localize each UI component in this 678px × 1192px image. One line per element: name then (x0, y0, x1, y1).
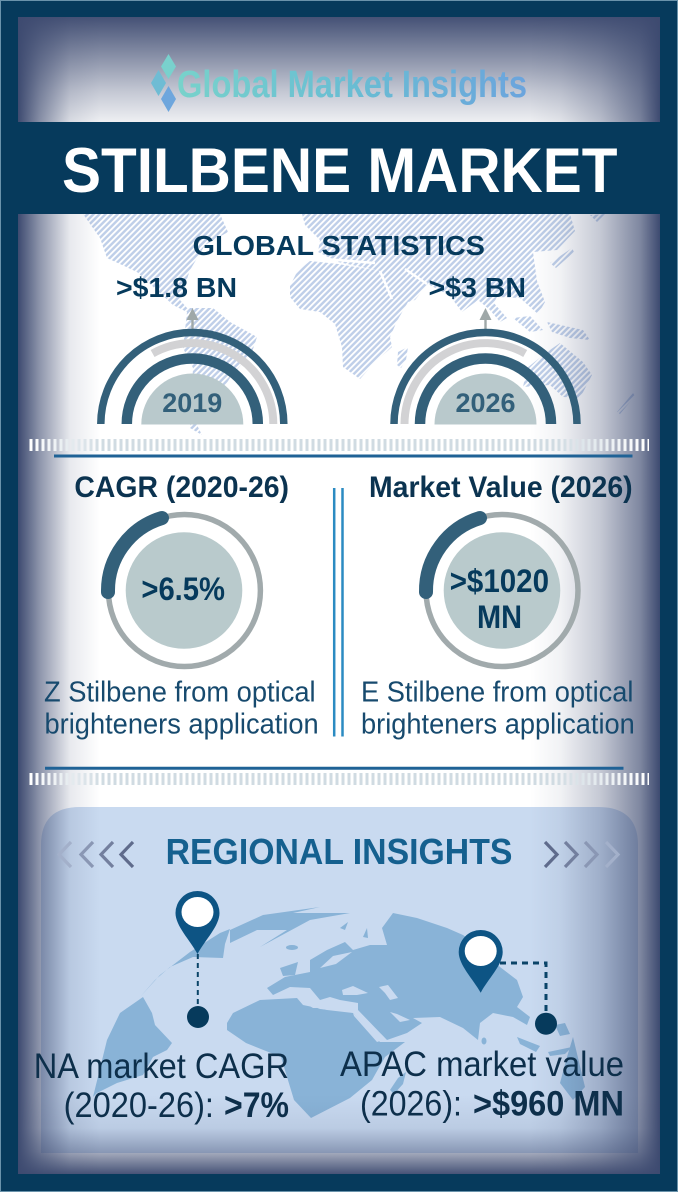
hatched world map background (83, 214, 635, 435)
arc gauge (394, 332, 577, 424)
stat: CAGR (44, 471, 319, 740)
callout: Asia Pacific: >$960 MN (473, 1084, 624, 1124)
year: 2026 (456, 388, 516, 418)
value: >6.5% (141, 571, 225, 607)
right chevrons (545, 842, 618, 867)
heading: Market Value (2026) (369, 471, 633, 504)
donut ring (108, 514, 260, 666)
value label: >$3 BN (428, 272, 526, 303)
description: brighteners application (361, 708, 635, 740)
logo icon: diamonds (151, 54, 176, 112)
heading: global statistics: GLOBAL STATISTICS (193, 230, 485, 261)
donut ring (426, 514, 578, 666)
vertical double divider (334, 488, 342, 736)
value: MN (477, 599, 522, 635)
stat: market value (361, 471, 635, 740)
callout: North America: (2020-26): (64, 1086, 214, 1125)
callout: North America: >7% (224, 1086, 289, 1125)
arc gauge (101, 333, 284, 424)
description (361, 676, 635, 740)
description: Z Stilbene from optical (44, 676, 316, 708)
logo wordmark: Global Market Insights (177, 64, 527, 106)
value label: >$1.8 BN (116, 272, 237, 303)
heading: CAGR (2020-26) (74, 471, 289, 504)
callout: Asia Pacific: APAC market value (340, 1045, 624, 1084)
year: 2019 (162, 388, 222, 418)
gauge: 2019 value (101, 272, 284, 424)
arrow up (480, 308, 492, 329)
map pin: Asia Pacific (459, 930, 557, 1035)
description: brighteners application (44, 708, 319, 740)
description: E Stilbene from optical (361, 676, 634, 708)
description (44, 676, 319, 740)
title: STILBENE MARKET (62, 136, 618, 206)
heading: regional insights: REGIONAL INSIGHTS (166, 831, 512, 872)
callout: North America: NA market CAGR (34, 1047, 289, 1086)
arrow up (186, 308, 198, 329)
value: >$1020 (450, 563, 549, 599)
gauge: 2026 value (394, 272, 577, 424)
logo (151, 54, 527, 112)
map pin: North America (176, 891, 220, 1028)
callout: Asia Pacific: (2026): (360, 1084, 462, 1124)
regional insights panel (41, 807, 638, 1153)
callout: Asia Pacific (340, 1045, 624, 1124)
globe illustration (93, 907, 585, 1118)
value (450, 563, 549, 635)
left chevrons (59, 842, 133, 867)
callout: North America (34, 1047, 289, 1125)
